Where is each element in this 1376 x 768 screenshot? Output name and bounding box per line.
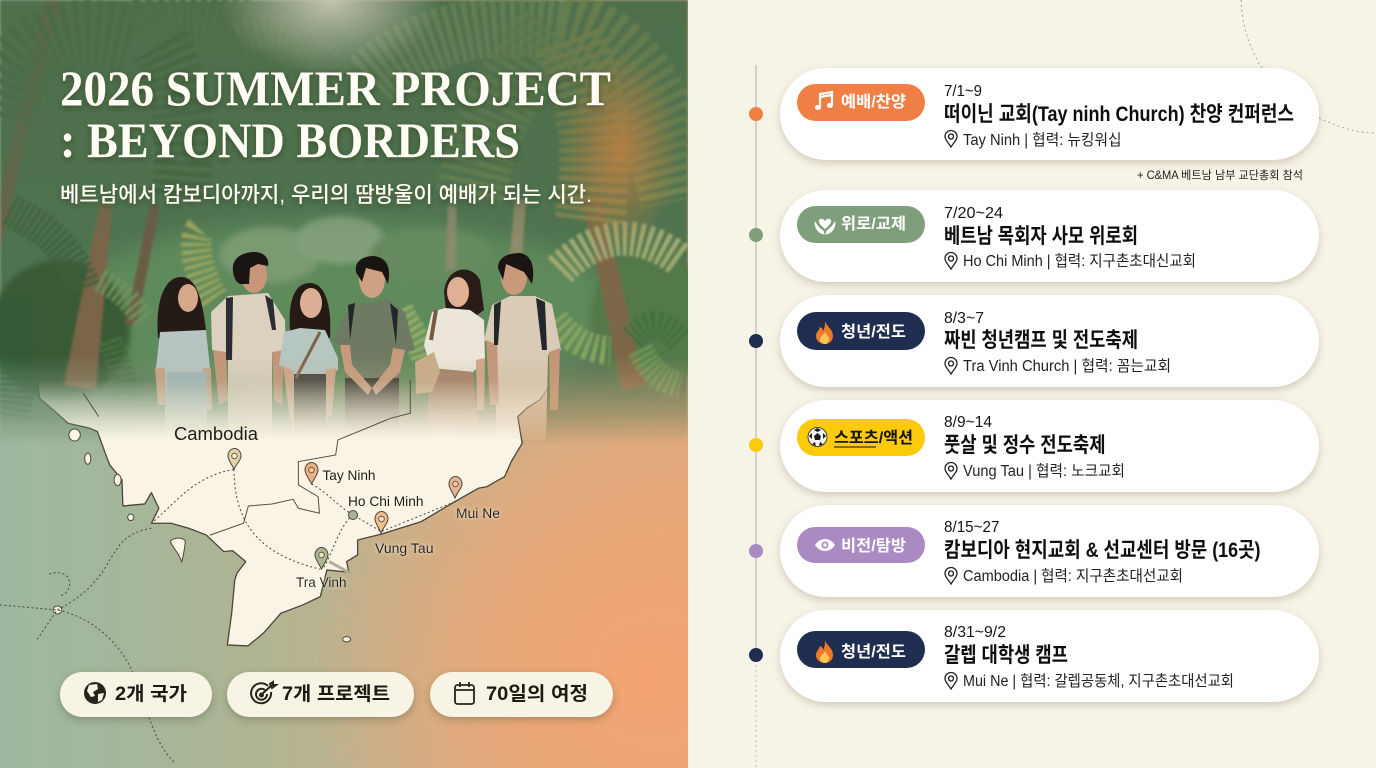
badge: comfort: [797, 206, 925, 243]
card 3: Tra Vinh youth camp: Tra Vinh Church | 협력: 꼼는교회: [963, 357, 1171, 375]
palm trunks: [0, 0, 62, 250]
mangrove shoreline: [329, 562, 349, 572]
card 1: worship conference: [780, 68, 1319, 160]
icon: location pin: [945, 462, 957, 479]
map labels: Vung Tau: [375, 540, 434, 556]
icon: flame: [816, 640, 833, 663]
card 5: Cambodia visits: 8/15~27: [944, 519, 1000, 536]
icon: location pin: [945, 568, 957, 584]
person 1: [155, 277, 212, 440]
card 2: pastors retreat: [780, 190, 1319, 282]
person 4: [333, 256, 415, 420]
person 5: [415, 270, 485, 421]
map labels: Ho Chi Minh: [348, 493, 424, 509]
stat pill: journey: 70일의 여정: [486, 683, 588, 705]
person 3: [279, 283, 338, 424]
card 6: Caleb camp: [780, 610, 1319, 702]
badge: worship: 예배/찬양: [841, 93, 906, 111]
card 2: pastors retreat: 7/20~24: [944, 205, 1003, 222]
map labels: Cambodia: [174, 424, 259, 444]
decorative dotted curves: [1241, 0, 1376, 133]
card 1: worship conference: Tay Ninh | 협력: 뉴킹워십: [963, 131, 1122, 149]
card 4: futsal festival: 8/9~14: [944, 414, 992, 431]
icon: location pin: [945, 253, 957, 269]
icon: location pin: [945, 672, 957, 689]
badge: sports: 스포츠/액션: [834, 429, 913, 447]
map labels: Tay Ninh: [322, 467, 376, 483]
team of six people: [155, 252, 561, 440]
card 3: Tra Vinh youth camp: 짜빈 청년캠프 및 전도축제: [944, 329, 1138, 352]
map pin: Cambodia: [228, 449, 241, 469]
card 6: Caleb camp: Mui Ne | 협력: 갈렙공동체, 지구촌초대선교회: [963, 672, 1234, 690]
provincial borders: [210, 380, 410, 535]
icon: globe: [84, 682, 106, 704]
icon: location pin: [945, 130, 957, 147]
badge: sports: [797, 419, 925, 456]
map pin: Mui Ne: [449, 477, 462, 498]
icon: flame: [816, 321, 833, 344]
title: 2026 SUMMER PROJECT: [60, 60, 611, 116]
badge: youth: [797, 312, 925, 350]
subtitle: 베트남에서 캄보디아까지, 우리의 땀방울이 예배가 되는 시간.: [60, 183, 592, 207]
badge: comfort: 위로/교제: [841, 215, 906, 233]
timeline axis: [749, 65, 763, 767]
title: [60, 60, 611, 168]
card 5: Cambodia visits: 캄보디아 현지교회 & 선교센터 방문 (16곳): [944, 539, 1260, 562]
map pin: Tay Ninh: [305, 463, 318, 484]
map labels: Mui Ne: [456, 505, 500, 521]
badge: vision: 비전/탐방: [841, 537, 906, 555]
map labels: Tra Vinh: [296, 574, 346, 590]
card 2: pastors retreat: Ho Chi Minh | 협력: 지구촌초대신교회: [963, 252, 1196, 270]
jungle backdrop: [0, 0, 710, 445]
icon: soccer ball: [808, 428, 827, 446]
route lines: [0, 469, 455, 763]
card 1: worship conference: 7/1~9: [944, 83, 982, 100]
icon: music note: [820, 92, 832, 107]
photo: palm jungle and team: [0, 0, 710, 445]
badge: vision: [797, 527, 925, 563]
card 1: worship conference: 떠이닌 교회(Tay ninh Church) 찬양 컨퍼런스: [944, 103, 1294, 126]
map pin: Vung Tau: [375, 512, 388, 533]
stat pill: journey: [430, 672, 613, 717]
stat pill: countries: [60, 672, 212, 717]
icon: heart in hands: [815, 219, 835, 234]
stat pill: projects: 7개 프로젝트: [282, 683, 390, 705]
land: [37, 380, 554, 646]
card 5: Cambodia visits: [780, 505, 1319, 597]
card 6: Caleb camp: 8/31~9/2: [944, 624, 1006, 641]
map of Cambodia and southern Vietnam: [0, 380, 554, 763]
right background: [688, 0, 1376, 768]
card 4: futsal festival: 풋살 및 정수 전도축제: [944, 434, 1106, 457]
person 2: [211, 252, 286, 440]
map labels: [174, 424, 500, 590]
icon: location pin: [945, 358, 957, 374]
icon: target: [251, 682, 276, 703]
stat pill: projects: [227, 672, 414, 717]
badge: youth: 청년/전도: [841, 643, 906, 661]
map marker: Ho Chi Minh: [348, 510, 358, 520]
map pin: Tra Vinh: [315, 548, 328, 569]
card 5: Cambodia visits: Cambodia | 협력: 지구촌초대선교회: [963, 567, 1183, 585]
card 4: futsal festival: [780, 400, 1319, 492]
left panel: gradient background: [0, 0, 688, 768]
fronds: [0, 14, 680, 420]
person 6: [484, 253, 561, 440]
card 2: pastors retreat: 베트남 목회자 사모 위로회: [944, 225, 1138, 248]
badge: youth: [797, 631, 925, 668]
icon: calendar: [455, 682, 474, 704]
title: : BEYOND BORDERS: [60, 112, 520, 168]
card 3: Tra Vinh youth camp: [780, 295, 1319, 387]
note: C&MA assembly: + C&MA 베트남 남부 교단총회 참석: [1137, 169, 1303, 182]
icon: eye: [815, 539, 835, 551]
card 3: Tra Vinh youth camp: 8/3~7: [944, 310, 984, 327]
badge: worship: [797, 84, 925, 121]
card 6: Caleb camp: 갈렙 대학생 캠프: [944, 644, 1068, 667]
card 4: futsal festival: Vung Tau | 협력: 노크교회: [963, 462, 1125, 480]
islands: [53, 429, 351, 642]
stat pill: countries: 2개 국가: [115, 683, 187, 705]
badge: youth: 청년/전도: [841, 323, 906, 341]
